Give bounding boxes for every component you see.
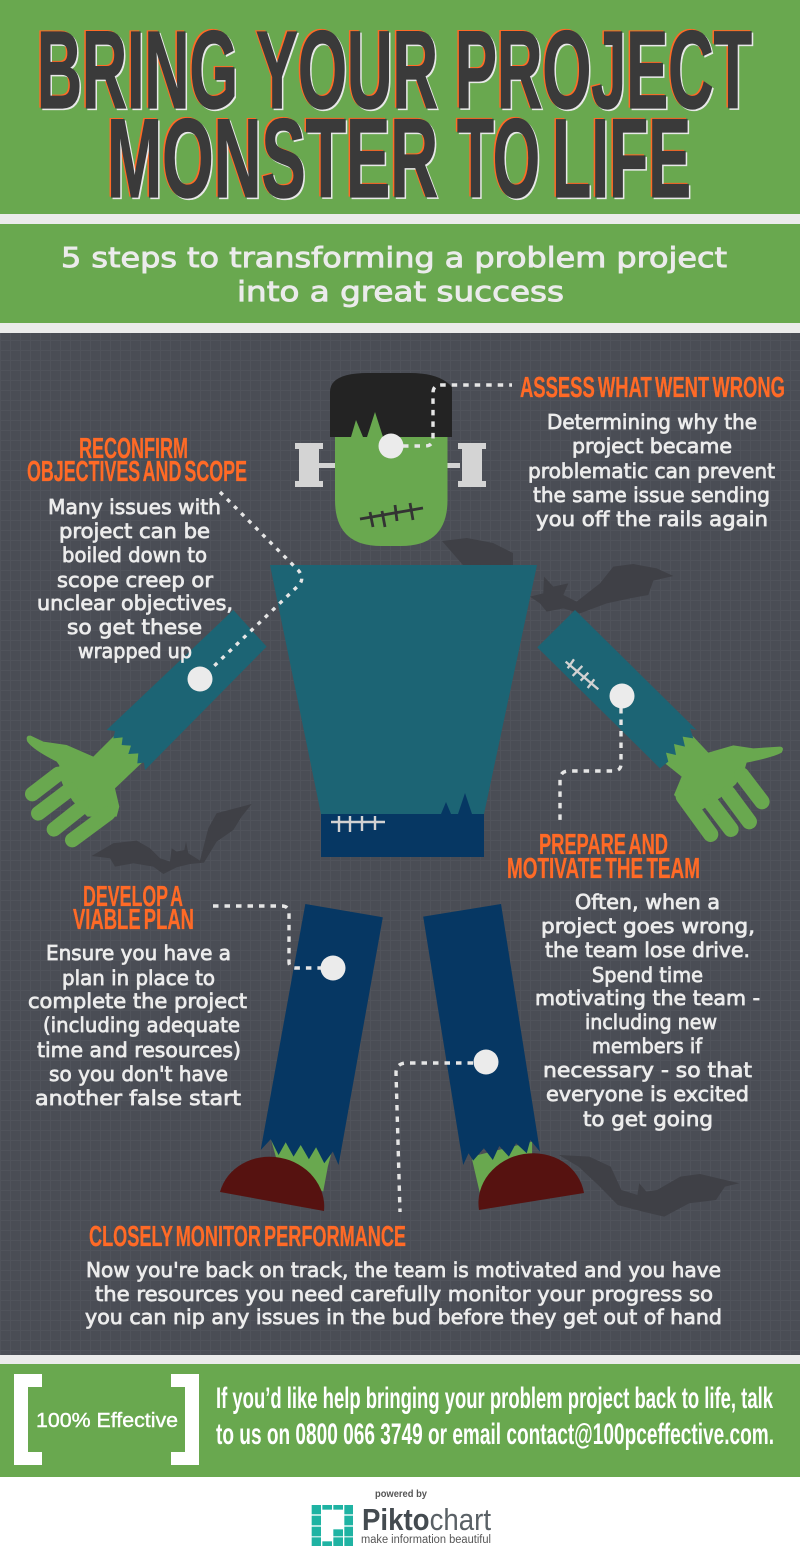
monster: torso xyxy=(270,565,537,857)
icon: right hand xyxy=(657,730,783,834)
body: everyone is excited xyxy=(546,1082,749,1106)
body: unclear objectives, xyxy=(37,591,233,615)
title: LIFE xyxy=(552,96,691,221)
arm stitches xyxy=(566,659,598,689)
title: TO xyxy=(457,96,540,221)
title: TO xyxy=(456,95,538,220)
body: including new xyxy=(585,1010,717,1034)
connector: assess xyxy=(403,385,512,446)
body: motivating the team - xyxy=(535,986,760,1010)
body: necessary - so that xyxy=(543,1058,752,1082)
body: another false start xyxy=(35,1086,241,1110)
mouth stitches xyxy=(360,503,423,527)
body: to get going xyxy=(583,1107,713,1131)
body: problematic can prevent xyxy=(528,459,775,483)
body: time and resources) xyxy=(37,1038,241,1062)
body: so get these xyxy=(67,615,202,639)
heading xyxy=(73,881,194,936)
body: boiled down to xyxy=(62,543,207,567)
connector: monitor xyxy=(396,1063,473,1212)
icon: right shoe xyxy=(478,1153,584,1210)
text block: closely monitor performance xyxy=(85,1221,722,1329)
monster: right leg xyxy=(423,904,540,1195)
body: Many issues with xyxy=(48,495,221,519)
title: LIFE xyxy=(554,98,692,222)
heading: CLOSELY MONITOR PERFORMANCE xyxy=(89,1221,406,1253)
monster: right arm xyxy=(537,610,783,834)
icon: bat lower left xyxy=(92,804,252,874)
right sleeve xyxy=(537,610,697,768)
monster: left arm xyxy=(27,610,267,840)
connector: prepare xyxy=(560,708,621,824)
panel: subtitle banner xyxy=(0,224,800,333)
body xyxy=(535,890,760,1131)
icon: Piktochart logo xyxy=(312,1505,353,1546)
shirt tear xyxy=(441,793,472,814)
body: wrapped up xyxy=(78,639,192,663)
heading: DEVELOP A xyxy=(83,881,183,913)
heading: RECONFIRM xyxy=(79,433,188,465)
subtitle: into a great success xyxy=(237,275,564,308)
contact text xyxy=(216,1382,774,1451)
title: BRING xyxy=(38,10,239,134)
footer: powered by Piktochart xyxy=(312,1488,491,1546)
monster: left leg xyxy=(261,904,383,1192)
text block: assess what went wrong xyxy=(520,372,785,531)
connector: reconfirm xyxy=(212,492,302,668)
subtitle xyxy=(61,241,727,308)
left sleeve xyxy=(107,610,267,770)
icon: left shoe xyxy=(220,1157,324,1211)
connector: develop xyxy=(213,906,321,968)
monster: head xyxy=(295,373,486,546)
body: Often, when a xyxy=(575,890,720,914)
title: MONSTER xyxy=(107,96,438,221)
title: YOUR xyxy=(256,9,438,132)
title: LIFE xyxy=(550,95,690,220)
panel: call to action xyxy=(0,1355,800,1477)
face xyxy=(335,405,448,546)
right trouser xyxy=(423,904,540,1165)
title: MONSTER xyxy=(106,95,436,220)
icon: left hand xyxy=(27,730,148,840)
body: (including adequate xyxy=(43,1013,240,1037)
hair xyxy=(330,373,452,437)
body: members if xyxy=(592,1034,703,1058)
powered by: powered by xyxy=(375,1488,427,1500)
icon: neck bolts xyxy=(295,443,486,487)
tagline: make information beautiful xyxy=(361,1534,491,1546)
icon: bat lower right xyxy=(559,1155,739,1217)
title: BRING xyxy=(37,9,238,132)
text block: reconfirm objectives and scope xyxy=(27,433,247,663)
logo: 100% Effective brackets xyxy=(14,1374,199,1465)
left trouser xyxy=(261,904,383,1165)
body: Ensure you have a xyxy=(46,941,231,965)
heading: PREPARE AND xyxy=(539,829,668,861)
body: so you don't have xyxy=(49,1062,228,1086)
title: YOUR xyxy=(254,8,436,131)
title: YOUR xyxy=(258,10,440,134)
body: Spend time xyxy=(592,963,703,987)
waistband xyxy=(321,814,484,857)
body xyxy=(85,1258,722,1329)
icon: bat upper right xyxy=(442,538,673,613)
marker dots xyxy=(188,434,634,1074)
heading: VIABLE PLAN xyxy=(73,904,194,936)
body: project became xyxy=(572,434,732,458)
title: BRING xyxy=(36,8,236,131)
body: plan in place to xyxy=(62,966,215,990)
body: Determining why the xyxy=(547,410,757,434)
body: the same issue sending xyxy=(533,483,770,507)
wordmark: Piktochart xyxy=(362,1502,491,1537)
body xyxy=(528,410,775,531)
waist stitches xyxy=(331,816,385,832)
body: you can nip any issues in the bud before they get out of hand xyxy=(85,1305,722,1329)
body: project goes wrong, xyxy=(541,914,755,938)
body: scope creep or xyxy=(57,568,214,592)
body: the team lose drive. xyxy=(545,938,750,962)
body: the resources you need carefully monitor your progress so xyxy=(95,1282,713,1306)
panel: title banner xyxy=(0,0,800,224)
body xyxy=(28,941,247,1110)
body: you off the rails again xyxy=(536,507,768,531)
subtitle: 5 steps to transforming a problem project xyxy=(61,241,727,274)
body: project can be xyxy=(59,519,210,543)
body: Now you're back on track, the team is motivated and you have xyxy=(86,1258,721,1282)
body: complete the project xyxy=(28,989,247,1013)
heading xyxy=(27,433,247,488)
title: MONSTER xyxy=(108,98,440,222)
logo: 100% Effective brackets: 100% Effective xyxy=(36,1410,178,1432)
text block: prepare and motivate the team xyxy=(507,829,760,1131)
body xyxy=(37,495,233,663)
panel: monster background xyxy=(0,333,800,1355)
text block: develop a viable plan xyxy=(28,881,247,1110)
heading xyxy=(507,829,700,885)
title xyxy=(36,8,754,222)
heading: MOTIVATE THE TEAM xyxy=(507,853,700,885)
title: TO xyxy=(458,98,542,222)
shirt xyxy=(270,565,537,814)
heading: OBJECTIVES AND SCOPE xyxy=(27,456,247,488)
